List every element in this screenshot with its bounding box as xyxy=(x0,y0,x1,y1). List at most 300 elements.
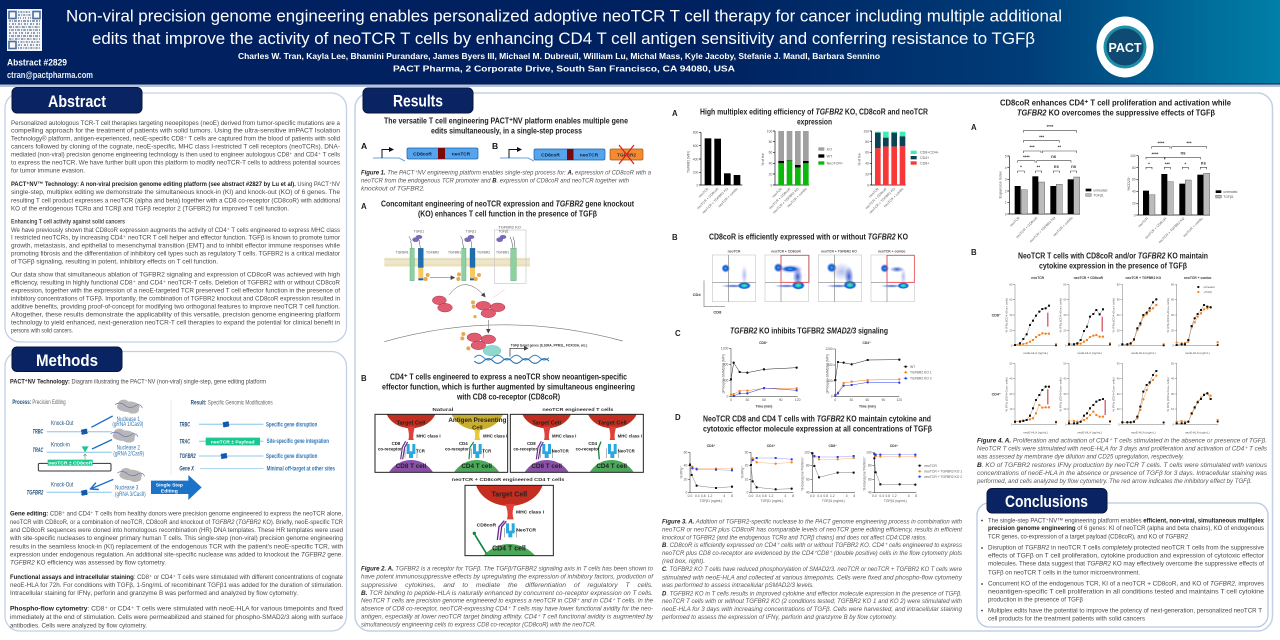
bar chart: expansion index: neoTCR + TGFBR2 KO xyxy=(1029,216,1057,243)
bottom row charts: 30 xyxy=(1063,392,1067,396)
figure 4 caption: B. KO of TGFBR2 restores IFNγ production by neoTCR T cells. T cells were stimulated with various xyxy=(977,462,1267,469)
heading: figure 4: TGFBR2 KO overcomes the suppressive effects of TGFβ xyxy=(1017,108,1215,118)
heading: figure 4 B xyxy=(971,248,1208,270)
result column: Site-specific gene integration xyxy=(267,438,329,445)
abstract text: mediated (non-viral) precision genome engineering technology is then used to engineer autologous CD8⁺ and CD4⁺ T cells xyxy=(11,152,340,159)
bar chart: TGFBR2 MFI: neoTCR + TGFBR2 KO xyxy=(701,187,729,214)
bar chart: TGFBR2 MFI xyxy=(686,131,742,214)
conclusions bullet list: TCR genes, co-expression of a target payload (CD8coR), and KO of TGFBR2 xyxy=(988,533,1189,540)
heading: figure 4 B: cytokine expression in the presence of TGFβ xyxy=(1039,262,1187,270)
chart: IFNγ CD8: 0.0 xyxy=(688,494,692,498)
result column: neoTCR ± Payload xyxy=(211,439,255,445)
top row charts: neoE-HLA (ng/mL) xyxy=(1077,351,1102,355)
bar chart: expansion index: 0 xyxy=(1005,212,1007,216)
heading: figure 3 C: C xyxy=(675,329,681,338)
natural: Cell xyxy=(472,425,483,431)
bar chart: CD25: ns xyxy=(1201,161,1206,166)
abstract text: cancers followed by cloning of the cognate, neoE-specific, MHC class I-restricted T cell receptors (neoTCRs). DNA- xyxy=(11,144,340,151)
bar chart: CD25 xyxy=(1127,141,1238,244)
nucleases: (gRNA 1/Cas9) xyxy=(112,421,143,428)
bottom row charts: 10 xyxy=(1009,407,1013,411)
figure 3 caption: neoTCR T cells with or without TGFBR2 KO (2 conditions tested; TGFBR2 KO 1 and KO 2) were stimulated with xyxy=(662,598,963,605)
figure 2 caption: B. TCR binding to peptide-HLA is naturally enhanced by concurrent co-receptor expression on T cells. xyxy=(361,590,653,597)
bar chart: expansion index: **** xyxy=(1047,124,1054,129)
abstract text: We have previously shown that CD8coR expression augments the activity of CD4⁺ T cells engineered to express MHC class xyxy=(11,227,340,234)
chart: CD8 pSMAD: 0 xyxy=(726,395,728,399)
chart: IFNγ CD8: TGFβ1 (ng/mL) xyxy=(700,499,722,503)
bottom row charts: 10 xyxy=(1063,407,1067,411)
natural: Antigen Presenting xyxy=(448,417,506,424)
diagram: precision editing platform xyxy=(12,399,335,500)
bar chart: TGFBR2 MFI: neoTCR + combo xyxy=(717,187,739,208)
abstract text: Personalized autologous TCR-T cell therapies targeting neoepitopes (neoE) derived from tumor-specific mutations are a xyxy=(11,120,341,127)
figure 1 panel A construct: CD8coR xyxy=(413,152,432,158)
methods text: expression under endogenous regulation. An additional site-specific nuclease was added to knockout the TGFBR2 gene. xyxy=(10,551,343,558)
methods text: Intracellular staining for IFNγ, perforin and granzyme B was performed and analyzed by flow cytometry. xyxy=(10,590,298,597)
figure 4 caption xyxy=(976,438,1267,485)
panel: methods xyxy=(5,347,346,631)
bottom row charts: % IFNγ (CD4+Ova+ cells) xyxy=(1112,377,1116,412)
stacked bar chart: neoTCR knock-in: 40 xyxy=(769,162,772,166)
natural: MHC class II xyxy=(483,434,508,439)
chart: CD8 pSMAD: 30 xyxy=(745,398,749,402)
figure 3 caption: knockout of TGFBR2 (and the endogenous TCRα and TCRβ chains) and does not affect CD4:CD8 ratios. xyxy=(662,534,927,541)
figure 1 caption: Figure 1. The PACT⁺NV engineering platform enables single-step process for: A. expression of CD8coR with a xyxy=(361,169,652,176)
abstract text: promoting fibrosis and the differentiation of inhibitory cell types such as regulatory T cells. TGFBR2 is a critical mediator xyxy=(11,251,340,258)
top row charts: 80 xyxy=(1009,282,1013,286)
bottom row charts: % IFNγ (CD4+Ova+ cells) xyxy=(1058,377,1062,412)
figure 3 caption: C. TGFBR2 KO T cells have reduced phosphorylation of SMAD2/3. neoTCR or neoTCR + TGFBR2 KO T cells were xyxy=(662,566,963,573)
PACT logo xyxy=(1096,16,1154,78)
conclusions bullet list: neoantigen-specific T cell proliferation in all conditions tested and maintains T cell cytokine xyxy=(988,589,1265,596)
bar chart: expansion index: 1 xyxy=(1005,201,1007,205)
natural: CD8 T cell xyxy=(396,463,427,470)
top row charts: 80 xyxy=(1063,282,1067,286)
heading: figure 3 C xyxy=(675,326,888,338)
heading: methods: Methods xyxy=(36,351,98,370)
heading: figure 3 A: A xyxy=(672,109,678,118)
chart: granzyme CD4: CD4⁺ xyxy=(890,444,898,448)
stacked bar chart: neoTCR knock-in: KO xyxy=(827,147,832,151)
legend: effector molecules: neoTCR + TGFBR2 KO 2 xyxy=(924,475,962,479)
bar chart: expansion index: *** xyxy=(1029,145,1035,150)
heading: methods xyxy=(12,347,122,372)
top row charts: 60 xyxy=(1117,298,1120,302)
chart: granzyme CD4: 80 xyxy=(868,464,872,468)
line chart grid: IFNγ dose response: CD4⁺ xyxy=(992,392,1001,396)
methods text: with site-specific nucleases to engineer primary human T cells. This single-step (non-viral) precision genome engineering xyxy=(9,535,344,542)
top row charts: 0 xyxy=(1173,344,1175,348)
heading: figure 4 B: B xyxy=(971,248,977,257)
natural: CD4 T cell xyxy=(461,463,492,470)
figure 2 caption: simultaneously engineering cells to express CD8 co-receptor (CD8coR) with the neoTCR. xyxy=(361,622,596,629)
neoTCR + CD8coR engineered: MHC class I xyxy=(516,509,545,515)
heading: figure 3 D: D xyxy=(675,413,681,422)
methods text: Phospho-flow cytometry : CD8⁺ or CD4⁺ T cells were stimulated with neoE-HLA for various timepoints and fixed xyxy=(10,606,344,613)
chart: granzyme CD4: 100 xyxy=(866,450,872,454)
chart: CD4 pSMAD: 0 xyxy=(834,398,836,402)
neoTCR + CD8coR engineered: Target Cell xyxy=(492,492,527,499)
bar chart: CD25: 80 xyxy=(1132,166,1136,170)
bar chart: TGFBR2 MFI: 600 xyxy=(693,144,698,148)
line charts: SMAD2/3 xyxy=(721,341,932,408)
bottom row charts: 40 xyxy=(1117,377,1120,381)
chart: CD4 pSMAD: 120 xyxy=(897,398,902,402)
bar chart: CD25: 60 xyxy=(1132,178,1136,182)
legend: effector molecules xyxy=(918,464,962,479)
figure 1 caption xyxy=(361,169,652,193)
arrow: single step editing: Editing xyxy=(161,489,178,495)
methods text: results in the seamless knock-in (KI) replacement of the endogenous TCR with the patient's neoE-specific TCR, with xyxy=(10,543,344,550)
chart: CD8 pSMAD: Time (min) xyxy=(756,404,772,408)
top row charts: 0 xyxy=(1118,344,1120,348)
line chart grid: IFNγ dose response: neoTCR + CD8coR xyxy=(1074,276,1104,280)
nucleases xyxy=(91,400,146,498)
figure 2 caption: have potent immunosuppressive effects by upregulating the expression of inhibitory factors, production of xyxy=(361,574,654,581)
nucleases: Nuclease 1 xyxy=(117,416,140,423)
bar chart: expansion index: 2 xyxy=(1005,189,1007,193)
top row charts: 60 xyxy=(1009,298,1013,302)
top row charts: % IFNγ (CD4+Ova+ cells) xyxy=(1058,298,1062,332)
figure 3 caption: D. TGFBR2 KO in T cells results in improved cytokine and effector molecule expression in the presence of TGFβ. xyxy=(662,590,962,597)
neoTCR engineered: MHC class I xyxy=(618,434,642,439)
figure 2 caption: absence of CD8 co-receptor, neoTCR-expressing CD4⁺ T cells may have lower functional avidity for the neo- xyxy=(361,606,653,613)
bar chart: CD25: * xyxy=(1148,161,1150,166)
methods text: TGFBR2 KO efficiency was assessed by flow cytometry. xyxy=(10,559,166,566)
neoTCR engineered: NeoTCR xyxy=(618,448,636,453)
figure 2 caption: NeoTCR T cells are precision genome engineered to express a neoTCR in CD8⁺ and in CD4⁺ T cells. In the xyxy=(361,598,654,605)
heading: figure 4 xyxy=(971,98,1232,132)
bottom row charts: 30 xyxy=(1171,392,1175,396)
figure 3 caption xyxy=(661,519,963,621)
heading: conclusions xyxy=(987,488,1107,513)
line chart grid: IFNγ dose response: neoTCR + combo xyxy=(1184,276,1211,280)
PACT logo: PACT xyxy=(1108,41,1142,55)
result column: Minimal off-target at other sites xyxy=(267,466,335,473)
bottom row charts: 50 xyxy=(1009,361,1013,365)
bar chart: CD25: TGFβ1 xyxy=(1223,195,1234,199)
top row charts: 20 xyxy=(1009,328,1013,332)
bar chart: CD25: *** xyxy=(1186,141,1192,146)
chart: CD8 pSMAD: 400 xyxy=(723,378,728,382)
chart: CD4 pSMAD xyxy=(825,341,902,408)
plot 3 xyxy=(826,262,857,289)
top row charts: 0 xyxy=(1011,344,1013,348)
diagram: TGFBR2 signaling pathway: TGFβ1 xyxy=(498,230,509,234)
abstract text: inhibitory concentrations of TGFβ. Importantly, the combination of TGFBR2 knockout and CD8coR expression resulted in xyxy=(11,295,341,302)
chart: CD8 pSMAD: 800 xyxy=(723,362,728,366)
heading: figure 3 D xyxy=(675,413,932,434)
chart: IFNγ CD4: 4 xyxy=(784,494,786,498)
chart: IFNγ CD8: CD8⁺ xyxy=(707,444,715,448)
panel: results xyxy=(355,88,1272,631)
figure 3 caption: neoE-HLA for 3 days with increasing concentrations of TGFβ. Cells were harvested, and intracellular staining xyxy=(662,606,963,613)
bottom row charts: 0 xyxy=(1065,422,1067,426)
top row charts: 40 xyxy=(1117,313,1120,317)
chart: CD8 pSMAD: 0 xyxy=(730,398,732,402)
top row charts: 20 xyxy=(1171,328,1175,332)
process column: TRBC xyxy=(33,429,44,436)
diagram: TGFBR2 signaling pathway xyxy=(384,224,623,363)
plot 4 xyxy=(880,264,909,289)
bar chart: expansion index: TGFβ1 xyxy=(1093,193,1104,197)
heading: abstract xyxy=(12,88,142,113)
abstract text: Technology® platform, antigen-experienced, neoE-specific CD8⁺ T cells are captured from the blood of patients with solid xyxy=(11,136,341,143)
natural xyxy=(374,408,508,473)
flow cytometry plots: neoTCR + CD8coR xyxy=(771,249,801,253)
title: edits that improve the activity of neoTCR T cells by enhancing CD4 T cell antigen sensitivity and conferring resistance to TGFβ xyxy=(92,30,1035,48)
bar chart: CD25: %CD25⁺ xyxy=(1127,176,1131,191)
bar chart: CD25: **** xyxy=(1158,141,1165,146)
line chart grid: IFNγ dose response xyxy=(992,276,1219,434)
chart: CD4 pSMAD: 1200 xyxy=(825,347,833,351)
heading: figure 2 B: effector function, which is further augmented by simultaneous engineering xyxy=(382,382,635,392)
chart: IFNγ CD8: 0 xyxy=(685,491,687,495)
chart: IFNγ CD8: 8 xyxy=(731,494,733,498)
top row charts xyxy=(1004,282,1219,355)
diagram: T cell receptor schematics xyxy=(375,377,643,613)
chart: granzyme CD8: 4 xyxy=(846,494,848,498)
process column: Knock-Out xyxy=(51,420,74,427)
bar chart: CD25: neoTCR xyxy=(1137,216,1149,228)
chart: granzyme CD4: % Granzyme⁺Perforin⁺ xyxy=(863,456,867,491)
chart: IFNγ CD4: 0.8 xyxy=(762,494,767,498)
conclusions bullet list xyxy=(981,517,1265,622)
heading: figure 3 A: expression xyxy=(797,118,832,126)
chart: granzyme CD8: 0.0 xyxy=(810,494,815,498)
legend: pSMAD: TGFBR2 KO 1 xyxy=(910,371,932,375)
authors: Charles W. Tran, Kayla Lee, Bhamini Purandare, James Byers III, Michael M. Dubreuil, William Lu, Michal Mass, Kyle Jacoby, Stefanie J. Mandl, Barbara Sennino xyxy=(238,52,880,61)
top row charts: 0 xyxy=(1065,344,1067,348)
natural: CD8 xyxy=(392,441,401,446)
affiliation: PACT Pharma, 2 Corporate Drive, South San Francisco, CA 94080, USA xyxy=(393,64,735,74)
abstract text: additive benefits, providing proof-of-concept for modifying two orthogonal features to improve neoTCR T cell function. xyxy=(11,303,340,310)
methods text: Gene editing: CD8⁺ and CD4⁺ T cells from healthy donors were precision genome engineered to express the neoTCR alone, xyxy=(10,511,343,518)
top row charts: neoE-HLA (ng/mL) xyxy=(1185,351,1210,355)
neoTCR engineered: Target Cell xyxy=(532,420,561,426)
figure 1 panel B construct: CD8coR xyxy=(541,152,560,158)
conclusions bullet list: Concurrent KO of the endogenous TCR, KI of a neoTCR + CD8coR, and KO of TGFBR2, improves xyxy=(988,581,1264,588)
abstract text: to express the neoTCR. We have further built upon this platform to modify neoTCR-T cells to address potential sources xyxy=(11,160,340,167)
flow cytometry plots: neoTCR + combo xyxy=(878,249,905,253)
arrow: single step editing: Single Step xyxy=(156,482,183,488)
stacked bar chart: neoTCR knock-in: 80 xyxy=(769,140,772,144)
nucleases: Nuclease 3 xyxy=(115,485,139,492)
bottom row charts xyxy=(1004,361,1219,434)
bottom row charts: 30 xyxy=(1117,392,1120,396)
methods diagram intro: PACT⁺NV Technology: Diagram illustrating the PACT⁺NV (non-viral) single-step, gene editing platform xyxy=(10,379,266,386)
result column: Result: Specific Genomic Modifications xyxy=(191,400,273,407)
bar chart: CD25: neoTCR + TGFBR2 KO xyxy=(1158,216,1186,244)
bar chart: TGFBR2 MFI: 200 xyxy=(693,171,698,175)
neoTCR engineered: co-receptor xyxy=(576,447,600,452)
top row charts: % IFNγ (CD4+Ova+ cells) xyxy=(1166,298,1170,332)
chart: CD8 pSMAD: CD8⁺ xyxy=(759,341,768,345)
chart: IFNγ CD4: TGFβ1 (ng/mL) xyxy=(761,499,783,503)
figure 2 caption xyxy=(361,566,654,629)
neoTCR engineered: CD4 T cell xyxy=(596,463,627,470)
abstract text: Our data show that simultaneous ablation of TGFBR2 signaling and expression of CD8coR was achieved with high xyxy=(11,271,341,278)
chart: IFNγ CD8: % IFNγ⁺ xyxy=(680,465,684,478)
process column: TGFBR2 xyxy=(27,489,44,496)
stacked bar chart: CD4 CD8 ratio: CD8+CD4+ xyxy=(920,151,939,155)
bottom row charts: % IFNγ (CD4+Ova+ cells) xyxy=(1166,377,1170,412)
natural: co-receptor xyxy=(445,447,469,452)
stacked bar chart: neoTCR knock-in: 0 xyxy=(770,183,772,187)
stacked bar chart: neoTCR knock-in: WT xyxy=(827,154,833,158)
stacked bar chart: neoTCR knock-in: neoTCR xyxy=(771,186,783,198)
bar chart: expansion index: 4 xyxy=(1005,166,1007,170)
process column: Knock-Out xyxy=(51,481,74,488)
chart: IFNγ CD8 xyxy=(680,444,733,503)
stacked bar chart: CD4 CD8 ratio: % of live xyxy=(858,153,862,166)
stacked bar chart: CD4 CD8 ratio: neoTCR + TGFBR2 KO xyxy=(868,187,896,214)
neoTCR engineered: NeoTCR xyxy=(552,448,570,453)
flow cytometry plots: neoTCR xyxy=(728,249,741,253)
chart: IFNγ CD4: 0.4 xyxy=(756,494,761,498)
methods text: neoTCR with CD8coR, or a combination of neoTCR, CD8coR and knockout of TGFBR2 (TGFBR2 KO). Briefly, neoE-specific TCR xyxy=(10,519,343,526)
line chart grid: IFNγ dose response: neoTCR xyxy=(1031,276,1045,280)
line chart grid: IFNγ dose response: neoTCR + TGFBR2 KO xyxy=(1125,276,1162,280)
top row charts: 60 xyxy=(1063,298,1067,302)
chart: granzyme CD8: 100 xyxy=(804,450,810,454)
abstract text: single-step, multiplex editing we demonstrate the simultaneous knock-in (KI) and knock-out (KO) of 6 genes. The xyxy=(11,189,341,196)
bar chart: TGFBR2 MFI: 400 xyxy=(693,157,698,161)
stacked bar chart: CD4 CD8 ratio: 20 xyxy=(865,172,869,176)
heading: figure 2 A: A xyxy=(361,202,367,211)
panel: conclusions xyxy=(977,488,1268,627)
heading: figure 1 xyxy=(384,116,629,136)
chart: granzyme CD8: % Granzyme⁺Perforin⁺ xyxy=(800,456,804,491)
heading: figure 2 B: with CD8 co-receptor (CD8coR) xyxy=(456,392,560,402)
chart: IFNγ CD4: 8 xyxy=(792,494,794,498)
natural: TCR xyxy=(416,448,426,453)
conclusions bullet list: molecules. These data suggest that TGFBR2 KO may effectively overcome the suppressive effects of xyxy=(988,561,1264,568)
bottom row charts: 50 xyxy=(1063,361,1067,365)
chart: granzyme CD4: 40 xyxy=(868,491,872,495)
bottom row charts: neoE-HLA (ng/mL) xyxy=(1131,430,1156,434)
abstract text: resulting T cell product expresses a neoTCR (alpha and beta) together with a CD8 co-receptor (CD8coR) with additional xyxy=(11,197,340,204)
bottom row charts: neoE-HLA (ng/mL) xyxy=(1185,430,1210,434)
process column: Process: Precision Editing xyxy=(12,399,66,406)
result column: TGFBR2 xyxy=(179,453,196,460)
chart: IFNγ CD8: 1.2 xyxy=(708,494,712,498)
heading: figure 4: A xyxy=(971,123,977,132)
nucleases: (gRNA 2/Cas9) xyxy=(113,450,144,457)
bar chart: expansion index: * xyxy=(1020,165,1022,170)
bar charts: proliferation and activation xyxy=(999,124,1238,244)
top row charts: untreated xyxy=(1203,285,1215,289)
bottom row charts: 40 xyxy=(1171,377,1175,381)
heading: figure 4: CD8coR enhances CD4⁺ T cell proliferation and activation while xyxy=(1000,98,1232,108)
chart: granzyme CD8: 8 xyxy=(853,494,855,498)
neoTCR engineered: CD8 T cell xyxy=(531,463,562,470)
line chart grid: IFNγ dose response: CD8⁺ xyxy=(992,313,1001,317)
chart: CD8 pSMAD: 120 xyxy=(795,398,801,402)
result column: Specific gene disruption xyxy=(266,421,317,428)
result column: TRAC xyxy=(179,438,190,445)
diagram: TGFBR2 signaling pathway: TGFβ target genes (IL10RA, PPM1L, FOXO3A, etc.) xyxy=(511,343,587,347)
bar chart: expansion index: ** xyxy=(1037,165,1040,170)
figure 4 caption: performed, and cells analyzed by flow cytometry. The red arrow indicates the inhibitory effect by TGFβ. xyxy=(976,478,1252,485)
heading: figure 1: The versatile T cell engineering PACT⁺NV platform enables multiple gene xyxy=(384,116,629,126)
figure 3 caption: (red box, right). xyxy=(662,558,705,565)
bottom row charts: 40 xyxy=(1009,377,1013,381)
result column xyxy=(179,400,335,473)
chart: CD8 pSMAD: pPhospho-SMAD2/3 (MFI) xyxy=(721,354,725,393)
stacked bar chart: CD4 CD8 ratio: neoTCR + CD8coR xyxy=(865,186,888,210)
chart: granzyme CD4: 0.0 xyxy=(872,494,877,498)
plot 1 xyxy=(721,264,751,289)
natural: co-receptor xyxy=(378,447,402,452)
chart: granzyme CD8: 0.4 xyxy=(817,494,822,498)
chart: granzyme CD4: 0.4 xyxy=(879,494,884,498)
chart: IFNγ CD4: 0.0 xyxy=(749,494,753,498)
figure 3 caption: stimulated with neoE-HLA and collected at various timepoints. Cells were fixed and phospho-flow cytometry xyxy=(662,574,963,581)
chart: IFNγ CD4: 0 xyxy=(746,491,748,495)
natural: TCR xyxy=(482,448,492,453)
chart: CD8 pSMAD xyxy=(721,341,801,408)
heading: figure 3 C: TGFBR2 KO inhibits TGFBR2 SMAD2/3 signaling xyxy=(730,326,888,336)
chart: IFNγ CD4: 30 xyxy=(745,450,748,454)
chart: granzyme CD8: 80 xyxy=(806,464,810,468)
bottom row charts: neoE-HLA (ng/mL) xyxy=(1023,430,1048,434)
top row charts: 80 xyxy=(1171,282,1175,286)
bar chart: CD25: 0 xyxy=(1134,213,1136,217)
top row charts: neoE-HLA (ng/mL) xyxy=(1023,351,1048,355)
neoTCR + CD8coR engineered: CD8coR xyxy=(477,523,496,529)
stacked bar chart: CD4 CD8 ratio: 100 xyxy=(863,129,869,133)
heading: figure 3 B: B xyxy=(672,233,678,242)
abstract text: expression, together with the expression of a neoE-targeted TCR preserved T cell effector function in the presence of xyxy=(11,287,340,294)
methods text xyxy=(9,511,344,629)
heading: figure 3 A: High multiplex editing efficiency of TGFBR2 KO, CD8coR and neoTCR xyxy=(700,108,928,116)
abstract text: KO of the endogenous TCRα and TCRβ and TGFβ receptor 2 (TGFBR2) for improved T cell function. xyxy=(11,205,289,212)
heading: figure 3 A xyxy=(672,108,928,126)
figure 4 caption: NeoTCR T cells were stimulated with neoE-HLA for 3 days and proliferation and activation of CD4⁺ T cells xyxy=(977,446,1267,453)
chart: CD4 pSMAD: 400 xyxy=(827,379,833,383)
abstract text xyxy=(11,120,341,335)
neoTCR + CD8coR engineered: NeoTCR xyxy=(516,527,536,533)
abstract text: efficiency, resulting in highly functional CD8⁺ and CD4⁺ neoTCR-T cells. Deletion of TGFBR2 with or without CD8coR xyxy=(11,279,341,286)
chart: granzyme CD8: TGFβ1 (ng/mL) xyxy=(822,499,845,503)
nucleases: Nuclease 2 xyxy=(117,445,140,452)
bar chart: expansion index: Expansion Index xyxy=(999,171,1003,198)
figure 1 panel B construct: TGFBR2 xyxy=(617,152,636,158)
result column: Gene X xyxy=(179,466,195,473)
chart: granzyme CD8: 40 xyxy=(806,491,810,495)
abstract text: compelling approach for the treatment of patients with solid tumors. Using the ultra-sensitive imPACT Isolation xyxy=(11,128,341,135)
legend: pSMAD: WT xyxy=(910,365,915,369)
chart: IFNγ CD8: 60 xyxy=(684,450,687,454)
chart: IFNγ CD8: 4 xyxy=(723,494,725,498)
stacked bar chart: neoTCR knock-in: % of live xyxy=(761,153,765,166)
figure 1 panel B construct: B xyxy=(492,141,498,151)
heading: figure 2 B: CD4⁺ T cells engineered to express a neoTCR show neoantigen-specific xyxy=(390,372,628,382)
flow cytometry plots xyxy=(693,249,914,315)
chart: granzyme CD8: 60 xyxy=(806,477,810,481)
chart: IFNγ CD8: 0.4 xyxy=(695,494,700,498)
chart: CD4 pSMAD: 60 xyxy=(865,398,869,402)
figure 1 caption: knockout of TGFBR2. xyxy=(361,186,425,193)
chart: IFNγ CD4: 1.2 xyxy=(769,494,773,498)
methods text: neoE-HLA for 72h. For conditions with TGFβ, 1-5ng/mL of recombinant TGFβ1 was added for the duration of stimulation. xyxy=(10,582,343,589)
chart: CD8 pSMAD: 90 xyxy=(779,398,783,402)
neoTCR engineered xyxy=(510,385,643,512)
conclusions bullet list: Multiplex edits have the potential to improve the potency of next-generation, personalized neoTCR T xyxy=(988,607,1262,614)
figure 1 panel A construct: neoTCR xyxy=(452,152,471,158)
neoTCR + CD8coR engineered: neoTCR + CD8coR engineered CD4 T cells xyxy=(452,477,565,483)
